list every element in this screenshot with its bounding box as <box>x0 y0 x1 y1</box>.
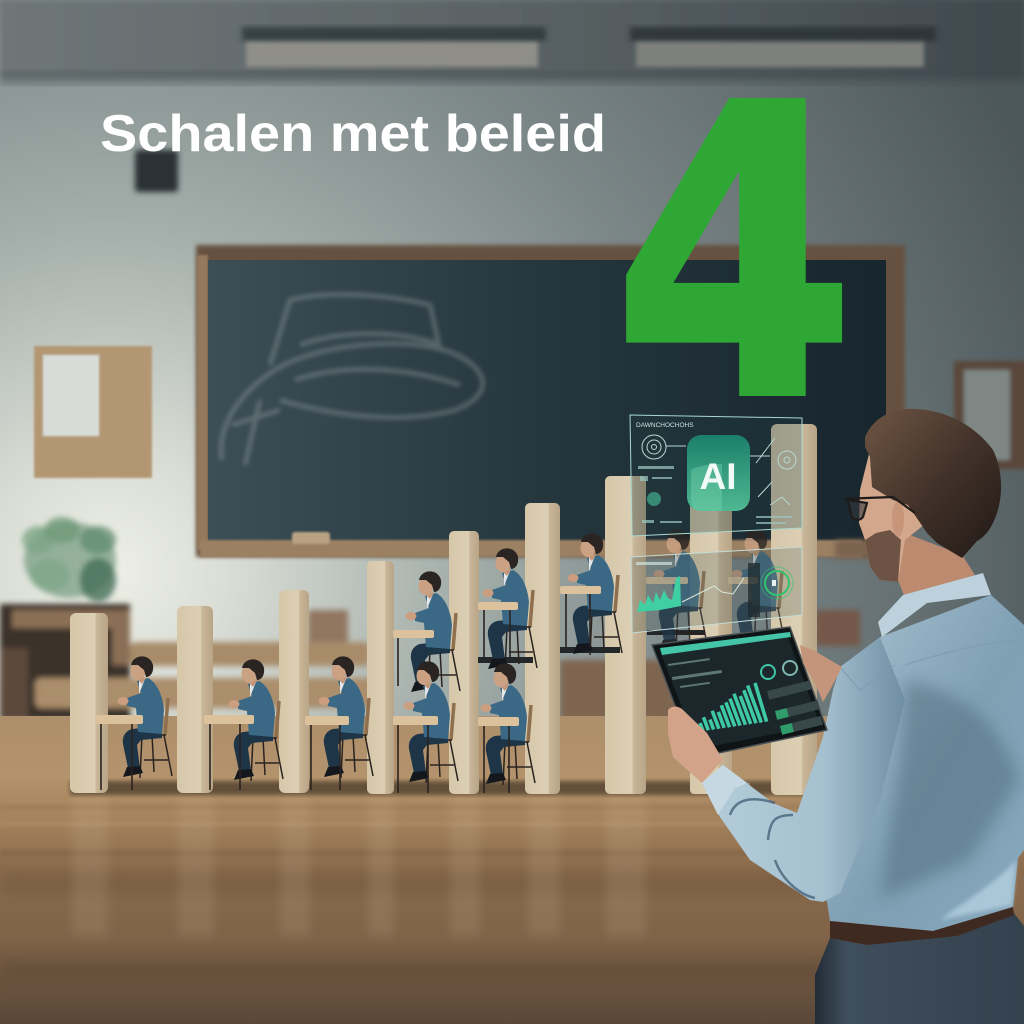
trousers <box>815 912 1024 1024</box>
growing domino blocks <box>70 476 646 794</box>
hair <box>865 409 1001 558</box>
AI label: AI <box>700 456 736 497</box>
hologram panel: charts <box>631 547 802 633</box>
contact shadow <box>70 781 820 795</box>
chalk sketch <box>221 295 483 465</box>
face <box>859 450 930 582</box>
dark monitor <box>748 563 760 617</box>
belt <box>830 907 1014 945</box>
tablet bar chart <box>700 683 767 731</box>
cork notice board <box>34 346 152 478</box>
shirt torso <box>825 595 1024 931</box>
ceiling with lights <box>0 0 1024 84</box>
blurred background desks <box>0 540 907 720</box>
ear <box>892 501 904 537</box>
shoulder seam <box>840 665 895 690</box>
chalkboard <box>196 245 905 557</box>
glasses <box>845 497 915 520</box>
sleeve <box>702 637 905 902</box>
tablet dashboard <box>652 627 827 758</box>
shelves for upper students <box>478 630 705 663</box>
large green number 4: 4 <box>613 20 856 488</box>
AI tile <box>687 435 750 511</box>
shirt highlight <box>940 860 1016 920</box>
neck <box>897 530 975 598</box>
beard <box>865 530 901 582</box>
domino reflections <box>72 796 646 936</box>
cuff <box>702 765 750 815</box>
mini line chart <box>682 578 744 602</box>
tablet gauges <box>761 661 797 679</box>
back shading <box>880 680 1020 900</box>
wall speaker <box>135 150 178 192</box>
title: Schalen met beleid <box>100 105 606 163</box>
rear domino blocks <box>690 424 817 795</box>
wooden table <box>0 716 1024 1024</box>
ring gauge <box>761 567 793 599</box>
man: hands on tablet <box>668 645 842 783</box>
desks and desk legs <box>95 577 758 793</box>
plant <box>22 517 116 602</box>
students at desks <box>95 529 786 793</box>
panel label: DAWNCHOCHOHS <box>636 422 694 429</box>
tablet widgets <box>767 680 823 735</box>
sleeve folds <box>730 799 815 898</box>
man: head <box>845 409 1001 637</box>
hologram panel: AI overview <box>630 415 802 536</box>
man: body and shirt <box>702 595 1024 1024</box>
picture frame on right wall <box>954 361 1024 469</box>
background: classroom wall <box>0 0 1024 730</box>
collar <box>878 573 991 637</box>
mini bar chart <box>637 576 681 612</box>
